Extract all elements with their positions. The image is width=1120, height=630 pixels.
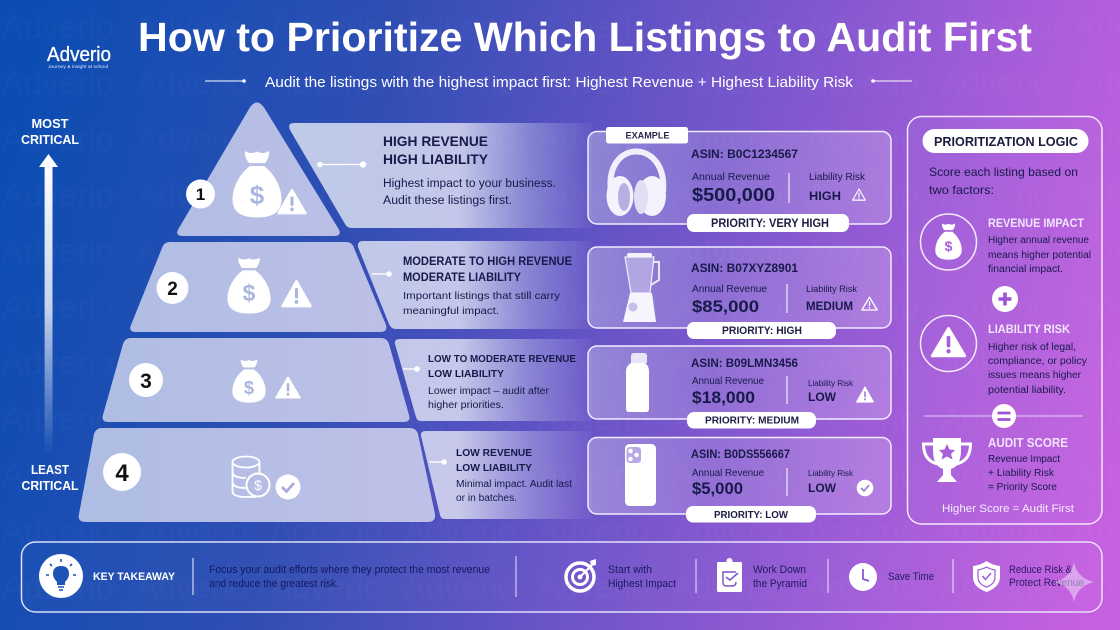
revenue impact text: financial impact. [988, 264, 1063, 275]
criticality axis [21, 116, 79, 493]
band 4 description: Minimal impact. Audit last [456, 479, 572, 490]
card 3: bottle: $18,000 [692, 388, 755, 407]
audit score text [988, 436, 1068, 493]
revenue impact text: means higher potential [988, 250, 1091, 261]
card 2: blender: MEDIUM [806, 301, 853, 313]
icon: revenue: $ [945, 238, 953, 254]
pyramid tier 4: 4 [115, 460, 129, 487]
band 1 description: HIGH REVENUE [383, 133, 488, 149]
audit score text: + Liability Risk [988, 468, 1054, 479]
card 2: blender: ASIN: B07XYZ8901 [691, 263, 799, 275]
panel: key takeaway bar: Save Time [888, 571, 934, 583]
panel: key takeaway bar [22, 542, 1102, 612]
icon: sparkle watermark [1054, 562, 1094, 602]
pyramid tier 3: 3 [140, 370, 152, 393]
icon: liability [920, 316, 976, 372]
band 1 description: HIGH LIABILITY [383, 151, 489, 167]
product: headphones [606, 152, 666, 216]
logo: Journey & insight at school [48, 64, 108, 69]
panel: key takeaway bar: the Pyramid [753, 578, 807, 590]
priority pill: PRIORITY: LOW [714, 509, 788, 521]
priority pill [686, 506, 816, 522]
plus sign [992, 286, 1018, 312]
icon: shield [973, 561, 1000, 592]
pyramid tier 1 [177, 102, 340, 236]
card 1: headphones: HIGH [809, 189, 841, 203]
panel: key takeaway bar: Focus your audit efforts where they protect the most revenue [209, 564, 490, 576]
card 4: phone: Annual Revenue [692, 467, 764, 479]
card 2: blender [588, 247, 891, 339]
band 4 description: LOW REVENUE [456, 447, 532, 459]
band 2 description: MODERATE TO HIGH REVENUE [403, 256, 572, 268]
panel: key takeaway bar: Start with [608, 564, 652, 576]
liability risk text: compliance, or policy [988, 356, 1087, 367]
card 3: bottle [588, 346, 891, 428]
card 4: phone: $5,000 [692, 480, 743, 498]
revenue impact text: REVENUE IMPACT [988, 218, 1084, 230]
card 4: phone: ASIN: B0DS556667 [691, 449, 790, 461]
card 1: headphones: $500,000 [692, 185, 775, 205]
priority pill [687, 412, 816, 428]
liability risk text: LIABILITY RISK [988, 324, 1071, 336]
band 4 description: LOW LIABILITY [456, 462, 532, 474]
criticality axis: CRITICAL [21, 132, 79, 147]
criticality axis: LEAST [31, 462, 69, 477]
pyramid tier 2 [130, 242, 386, 332]
panel: prioritization logic: Higher Score = Audit First [942, 503, 1074, 515]
priority pill: PRIORITY: HIGH [722, 325, 802, 337]
band 3 description: LOW TO MODERATE REVENUE [428, 353, 576, 365]
logo: Adverio [47, 44, 111, 66]
panel: prioritization logic [908, 116, 1102, 524]
pyramid tier 1: $ [250, 180, 265, 210]
icon: coin stack: $ [254, 477, 262, 493]
card 4: phone: Liability Risk [808, 468, 854, 478]
card 3: bottle: ASIN: B09LMN3456 [691, 358, 798, 370]
priority pill [687, 214, 849, 232]
criticality axis: MOST [32, 116, 69, 131]
panel: key takeaway bar: KEY TAKEAWAY [93, 571, 176, 583]
band 4 description [421, 431, 592, 519]
card 3: bottle: LOW [808, 392, 836, 404]
audit score text: = Priority Score [988, 482, 1057, 493]
band 3 description: higher priorities. [428, 400, 504, 411]
liability risk text [988, 324, 1087, 396]
pyramid tier 2: $ [243, 280, 256, 306]
band 2 description: MODERATE LIABILITY [403, 272, 521, 284]
priority pill [687, 322, 836, 339]
band 3 description: Lower impact – audit after [428, 386, 550, 397]
product: blender [623, 253, 659, 322]
band 2 description [358, 241, 592, 329]
band 3 description: LOW LIABILITY [428, 368, 504, 380]
card 2: blender: Annual Revenue [692, 283, 767, 295]
panel: prioritization logic: Score each listing based on [929, 165, 1078, 179]
card 1: headphones: Annual Revenue [692, 171, 770, 183]
priority pill: PRIORITY: VERY HIGH [711, 218, 829, 230]
icon: trophy [924, 438, 970, 482]
band 1 description [289, 123, 592, 228]
card 3: bottle: Liability Risk [808, 378, 854, 388]
heading [922, 129, 1088, 153]
example tag: EXAMPLE [626, 130, 670, 140]
band 4 description: or in batches. [456, 493, 517, 504]
panel: key takeaway bar: Work Down [753, 564, 806, 576]
liability risk text: potential liability. [988, 385, 1066, 396]
panel: key takeaway bar: Highest Impact [608, 578, 676, 590]
pyramid tier 1: 1 [196, 185, 205, 204]
revenue impact text: Higher annual revenue [988, 235, 1089, 246]
card 2: blender: Liability Risk [806, 284, 857, 295]
band 3 description [395, 339, 592, 421]
subtitle: Audit the listings with the highest impact first: Highest Revenue + Highest Liability Risk [265, 75, 854, 91]
icon: clock [849, 563, 877, 591]
icon: coin stack [232, 456, 270, 497]
criticality axis: CRITICAL [22, 478, 79, 493]
audit score text: Revenue Impact [988, 454, 1060, 465]
card 4: phone: LOW [808, 483, 836, 495]
band 1 description: Audit these listings first. [383, 195, 512, 207]
panel: key takeaway bar: Protect Revenue [1009, 577, 1084, 589]
pyramid tier 3: $ [244, 378, 254, 398]
card 3: bottle: Annual Revenue [692, 375, 764, 387]
title: How to Prioritize Which Listings to Audit First [138, 14, 1032, 60]
pyramid tier 3 [103, 338, 409, 422]
product: bottle [626, 353, 649, 412]
band 2 description: Important listings that still carry [403, 290, 561, 302]
product: phone [625, 444, 656, 506]
card 1: headphones: Liability Risk [809, 172, 866, 183]
revenue impact text [988, 218, 1091, 275]
card 1: headphones: ASIN: B0C1234567 [691, 149, 798, 161]
card 2: blender: $85,000 [692, 297, 759, 316]
audit score text: AUDIT SCORE [988, 436, 1068, 450]
equals sign [924, 404, 1083, 428]
liability risk text: Higher risk of legal, [988, 342, 1076, 353]
pyramid tier 2: 2 [167, 279, 178, 300]
panel: key takeaway bar: Reduce Risk & [1009, 564, 1073, 576]
icon: revenue [920, 214, 976, 270]
icon: clipboard [717, 558, 742, 592]
band 2 description: meaningful impact. [403, 305, 499, 317]
priority pill: PRIORITY: MEDIUM [705, 414, 799, 426]
card 4: phone [588, 438, 891, 522]
band 1 description: Highest impact to your business. [383, 178, 556, 190]
panel: key takeaway bar: and reduce the greatest risk. [209, 578, 339, 590]
panel: prioritization logic: two factors: [929, 183, 994, 197]
heading: PRIORITIZATION LOGIC [934, 134, 1079, 149]
liability risk text: issues means higher [988, 370, 1082, 381]
pyramid tier 4 [79, 428, 435, 522]
card 1: headphones [588, 127, 891, 232]
example tag [606, 127, 688, 144]
icon: light bulb [39, 554, 83, 598]
icon: target [566, 559, 596, 591]
